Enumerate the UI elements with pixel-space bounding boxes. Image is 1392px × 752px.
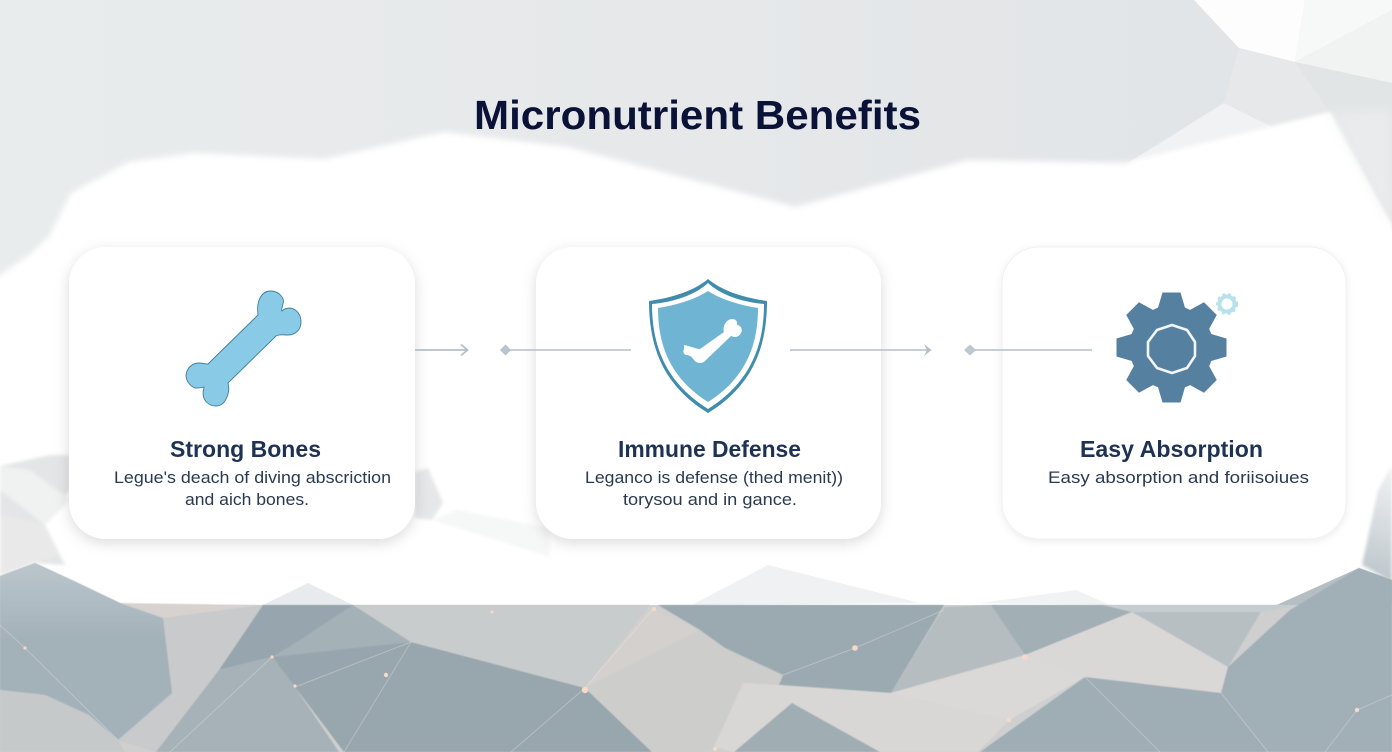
card background: strong bones bbox=[69, 247, 415, 539]
description: easy absorption: Easy absorption and foriisoiues bbox=[1048, 468, 1309, 487]
icon: shield with bone bbox=[649, 279, 767, 413]
description: strong bones: Legue's deach of diving abscriction bbox=[114, 468, 391, 487]
arrow: shield to right bbox=[790, 344, 932, 356]
network lines and glowing nodes bbox=[0, 607, 1392, 752]
description: immune defense bbox=[585, 468, 843, 509]
heading: easy absorption: Easy Absorption bbox=[1080, 436, 1263, 462]
icon: small gear bbox=[1217, 294, 1237, 314]
arrow: bones to right bbox=[415, 344, 468, 356]
icon: gear bbox=[1116, 292, 1226, 402]
description: immune defense: torysou and in gance. bbox=[623, 490, 797, 509]
panel: immune defense bbox=[536, 247, 881, 539]
heading: immune defense: Immune Defense bbox=[618, 436, 801, 462]
description: immune defense: Leganco is defense (thed menit)) bbox=[585, 468, 843, 487]
arrow: diamond tail to gear bbox=[964, 344, 1092, 356]
card background: easy absorption bbox=[1002, 247, 1346, 539]
panel: easy absorption bbox=[1002, 247, 1346, 539]
panel: strong bones bbox=[69, 247, 415, 539]
heading: strong bones: Strong Bones bbox=[170, 436, 321, 462]
title: Micronutrient Benefits bbox=[474, 92, 921, 138]
arrow: diamond tail to shield bbox=[500, 344, 631, 356]
description: strong bones bbox=[114, 468, 391, 509]
icon: bone bbox=[186, 291, 301, 406]
card background: immune defense bbox=[536, 247, 881, 539]
description: strong bones: and aich bones. bbox=[185, 490, 309, 509]
low-poly band at the bottom bbox=[0, 563, 1392, 752]
